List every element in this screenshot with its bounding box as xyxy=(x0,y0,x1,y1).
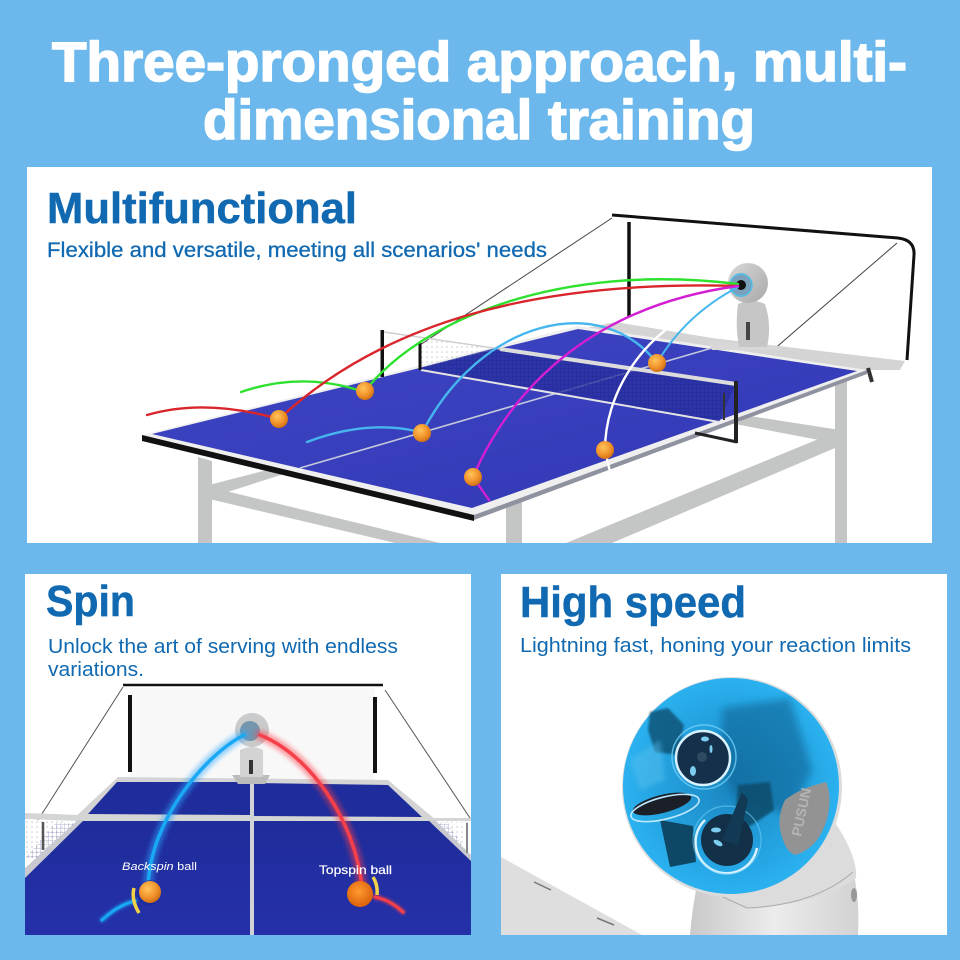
backstop frame xyxy=(420,215,914,382)
robot base plate xyxy=(501,857,642,935)
text: spin description: variations. xyxy=(48,658,144,681)
backspin ball xyxy=(133,878,163,913)
panel: high speed xyxy=(501,574,947,935)
net xyxy=(380,330,738,443)
translucent head sphere xyxy=(622,677,842,897)
heading: multifunctional: Multifunctional xyxy=(47,184,357,233)
ping pong balls xyxy=(270,354,666,486)
backspin arc xyxy=(102,735,244,920)
title: Three-pronged approach, multi- xyxy=(52,30,907,93)
table legs and frame xyxy=(198,381,847,543)
motor ring xyxy=(628,788,702,827)
serving robot xyxy=(709,263,782,350)
label: backspin ball: Backspin ball xyxy=(122,861,197,873)
table top xyxy=(142,326,867,521)
motor wheel: upper xyxy=(672,725,736,789)
label: topspin ball: Topspin ball xyxy=(319,863,392,877)
topspin arc xyxy=(260,735,403,912)
serving robot xyxy=(232,713,270,784)
ball flight paths xyxy=(147,279,738,500)
text: high speed description: Lightning fast, honing your reaction limits xyxy=(520,634,911,657)
text: multifunctional description: Flexible and versatile, meeting all scenarios' needs xyxy=(47,238,547,262)
rear catch rail xyxy=(586,322,905,370)
title: dimensional training xyxy=(203,88,755,151)
title xyxy=(52,30,907,151)
table xyxy=(25,777,471,935)
panel: multifunctional xyxy=(27,167,932,543)
backstop net xyxy=(25,685,471,859)
text: spin description xyxy=(48,635,398,681)
logo badge xyxy=(779,782,830,855)
table clamp xyxy=(868,368,872,382)
logo badge: PUSUN xyxy=(788,786,814,838)
heading: spin: Spin xyxy=(46,577,135,626)
topspin ball xyxy=(347,877,377,907)
motor wheel: lower xyxy=(693,792,761,874)
heading: high speed: High speed xyxy=(520,578,746,627)
text: spin description: Unlock the art of serving with endless xyxy=(48,635,398,658)
panel: spin xyxy=(25,574,471,935)
robot body xyxy=(690,815,858,935)
